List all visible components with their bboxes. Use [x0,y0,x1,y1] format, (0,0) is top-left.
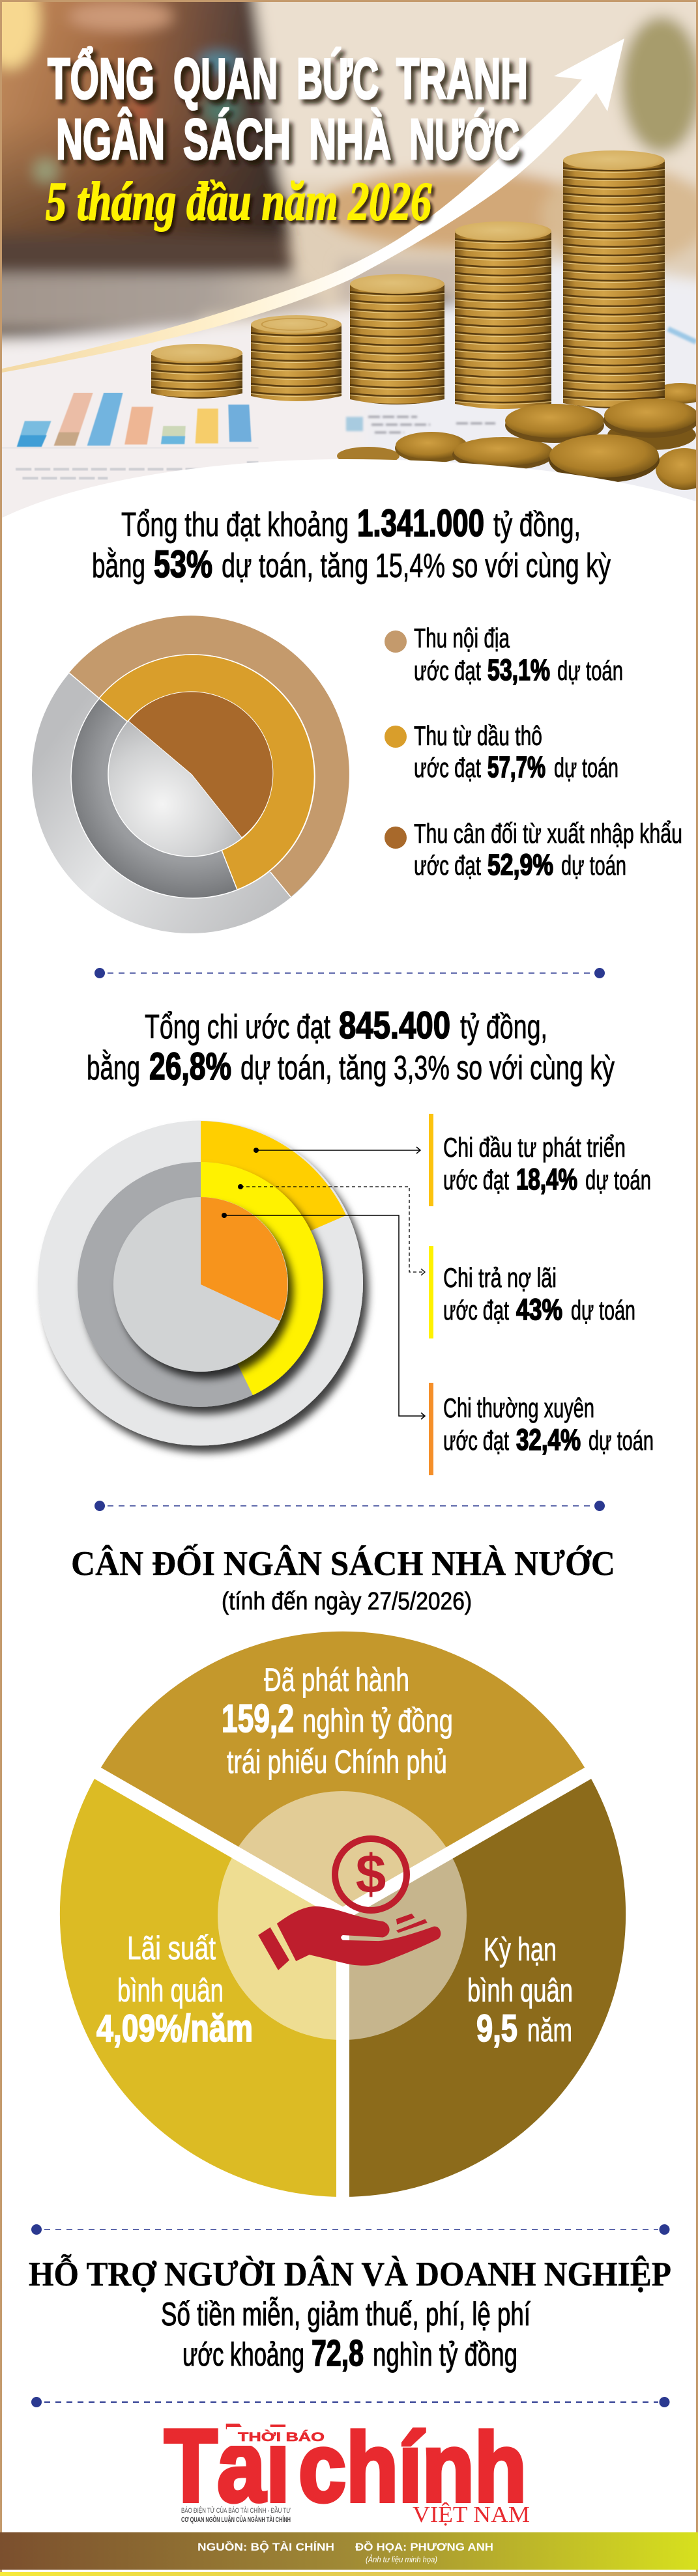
paper details [346,329,696,432]
connector: interest payment [238,1184,425,1275]
text: estimated total: nghìn tỷ đồng [373,2336,517,2373]
connector: development spending [254,1147,420,1154]
title [46,46,528,232]
label: average interest rate: 4,09%/năm [96,2007,253,2050]
section heading: total expenditure: 845.400 [339,1004,450,1047]
legend item: crude oil revenue [385,720,618,784]
legend item: domestic revenue: 53,1% [487,653,550,686]
connector: recurrent spending [222,1213,425,1419]
chart: expenditure concentric donut [38,1120,363,1446]
text: fee reductions: Số tiền miễn, giảm thuế, phí, lệ phí [161,2296,531,2332]
pie sector: average interest [60,1773,343,2197]
text: estimated total: ước khoảng [182,2336,304,2373]
label: average maturity: bình quân [467,1972,573,2009]
logo: Thời báo Tài chính Việt Nam: chính [298,2413,527,2522]
title line 2 [56,107,519,171]
legend item: recurrent spending: Chi thường xuyên [443,1393,594,1423]
text: estimated total: 72,8 [312,2332,364,2374]
title line 1: TỔNG [48,46,154,111]
icon: coin stack 1 [151,344,242,399]
legend item: development investment [429,1114,651,1206]
section heading: total expenditure: bằng [87,1049,140,1087]
chart: budget balance pie [60,1632,626,2205]
legend item: domestic revenue: Thu nội địa [414,623,510,653]
legend item: recurrent spending: dự toán [589,1425,654,1456]
section: support for people and businesses [29,2254,671,2374]
icon: loose coins [337,399,698,490]
section heading: total revenue [92,502,611,586]
legend: revenue sources [385,623,682,881]
footer band [0,2532,698,2576]
title subtitle: period: 5 tháng đầu năm 2026 [46,171,431,232]
background coin [665,383,696,404]
section heading: total expenditure [87,1004,615,1088]
label: average maturity [467,1931,573,2050]
white gaps [85,1766,601,2205]
section heading: total revenue: Tổng thu đạt khoảng [121,506,349,544]
section heading: total revenue: tỷ đồng, [493,506,581,544]
section heading: total revenue: bằng [92,547,145,585]
icon: rising arrow [2,38,624,373]
logo: Thời báo Tài chính Việt Nam: THỜI BÁO [238,2430,325,2444]
heading: HỖ TRỢ NGƯỜI DÂN VÀ DOANH NGHIỆP [29,2254,671,2293]
title line 2: NGÂN [56,107,165,171]
title line 2: NHÀ [309,107,391,171]
legend item: domestic revenue: dự toán [557,655,623,686]
section heading: total revenue: 53% [154,543,212,586]
legend: expenditure items [429,1114,654,1475]
legend item: crude oil revenue: 57,7% [487,750,545,784]
label: bonds issued: nghìn tỷ đồng [302,1703,453,1739]
credit: photo note: (Ảnh tư liệu minh họa) [366,2555,437,2564]
logo: Thời báo Tài chính Việt Nam: BÁO ĐIỆN TỬ CỦA BÁO TÀI CHÍNH - ĐẦU TƯ [181,2506,291,2515]
text: estimated total [182,2332,517,2374]
pie sector: bonds issued [98,1632,588,1914]
legend item: recurrent spending: ước đạt [443,1425,509,1456]
title line 1: TRANH [396,46,528,111]
icon: coin stack 3 [350,274,444,404]
divider 3 [31,2224,670,2235]
label: average maturity: Kỳ hạn [484,1931,557,1968]
label: average maturity: 9,5 [476,2007,517,2050]
legend item: development investment: 18,4% [516,1163,577,1196]
legend item: interest payment [429,1246,635,1338]
legend item: interest payment: dự toán [571,1295,635,1325]
legend item: development investment: ước đạt [443,1165,509,1195]
legend item: import-export revenue: ước đạt [414,850,481,881]
icon: hand holding dollar coin: $ [356,1843,386,1904]
section heading: total expenditure: Tổng chi ước đạt [145,1008,330,1046]
label: bonds issued: Đã phát hành [264,1662,409,1698]
label: bonds issued: 159,2 [222,1697,294,1740]
title line 1 [48,46,528,111]
title line 1: QUAN [173,46,278,111]
legend item: import-export revenue [385,818,682,881]
icon: hand holding dollar coin [258,1839,441,1970]
section heading: budget balance [71,1544,615,1615]
label: average interest rate: Lãi suất [127,1930,216,1966]
logo: Thời báo Tài chính Việt Nam [164,2409,530,2527]
credit: graphics: ĐỒ HỌA: PHƯƠNG ANH [355,2541,493,2553]
label: bonds issued: trái phiếu Chính phủ [227,1744,447,1780]
legend item: domestic revenue [385,623,623,686]
inner translucent circle [218,1791,467,2040]
legend item: recurrent spending [429,1383,654,1475]
divider 2 [95,1501,605,1511]
icon: coin stack 2 [251,315,342,401]
section heading: total expenditure: 26,8% [149,1045,231,1088]
title line 2: NƯỚC [409,107,519,171]
label: average maturity: năm [527,2012,572,2048]
legend item: import-export revenue: dự toán [561,850,626,881]
label: average interest rate: bình quân [117,1972,224,2009]
credit: source: NGUỒN: BỘ TÀI CHÍNH [197,2541,334,2553]
legend item: development investment: Chi đầu tư phát triển [443,1132,626,1163]
legend item: import-export revenue: 52,9% [487,848,553,881]
divider 1 [95,968,605,978]
icon: coin stack 5 [563,150,665,408]
pie sector: average maturity [343,1773,626,2197]
legend item: interest payment: Chi trả nợ lãi [443,1262,557,1293]
title line 2: SÁCH [183,107,291,171]
legend item: domestic revenue: ước đạt [414,655,481,686]
hero photo: coin stacks and rising arrow [0,0,698,528]
legend item: recurrent spending: 32,4% [516,1423,581,1456]
chart: revenue concentric donut [32,616,349,933]
logo: Thời báo Tài chính Việt Nam: CƠ QUAN NGÔN LUẬN CỦA NGÀNH TÀI CHÍNH [181,2515,291,2524]
legend item: interest payment: 43% [516,1293,562,1326]
icon: coin stack 4 [455,221,551,409]
legend item: interest payment: ước đạt [443,1295,509,1325]
label: average interest rate [96,1930,253,2050]
connector arrows [222,1147,425,1419]
label: bonds issued [222,1662,453,1780]
legend item: crude oil revenue: Thu từ dầu thô [414,720,542,751]
icon: blurred bar chart on paper [2,393,258,479]
section heading: total expenditure: tỷ đồng, [460,1008,547,1046]
section heading: budget balance: CÂN ĐỐI NGÂN SÁCH NHÀ NƯỚC [71,1544,615,1583]
logo: Thời báo Tài chính Việt Nam: Tài [164,2409,290,2523]
divider 4 [31,2397,670,2407]
legend item: crude oil revenue: ước đạt [414,752,481,783]
title line 1: BỨC [297,46,379,111]
section heading: total revenue: 1.341.000 [357,502,484,545]
legend item: crude oil revenue: dự toán [554,752,618,783]
heading date note: (tính đến ngày 27/5/2026) [222,1588,472,1615]
legend item: development investment: dự toán [585,1165,651,1195]
logo: Thời báo Tài chính Việt Nam: VIỆT NAM [413,2502,530,2527]
